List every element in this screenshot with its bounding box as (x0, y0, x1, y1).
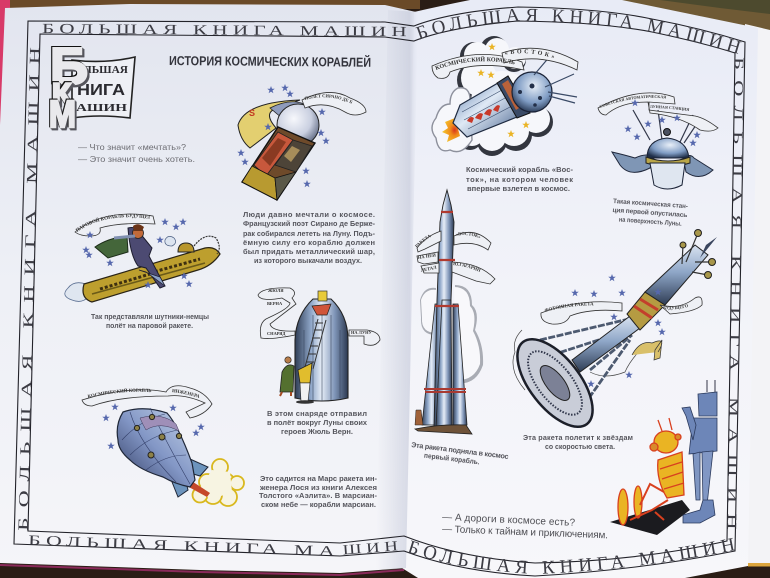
decorative border frame: БОЛЬШАЯ КНИГА МАШИН (724, 57, 747, 540)
shell body (295, 299, 348, 401)
fins (190, 459, 208, 476)
decorative border frame: ШИН (342, 539, 403, 558)
stars (477, 43, 530, 137)
truss (540, 318, 636, 405)
logo: Большая книга машин: НИГА (77, 82, 126, 99)
banner (302, 92, 366, 115)
small capsule on wire (632, 340, 662, 360)
gutter shade (376, 10, 418, 571)
reflector dish (503, 327, 607, 439)
text: Cyrano (243, 210, 375, 265)
illustration: lunar station: ЛУННАЯ СТАНЦИЯ (650, 105, 690, 112)
text: steam rocket caption (91, 312, 209, 330)
left exhaust puff (432, 88, 472, 152)
illustration: Jules Verne shell: ВЕРНА (267, 301, 283, 306)
decorative border frame: БОЛЬШАЯ КНИГА МА (28, 534, 340, 560)
banners (258, 288, 296, 339)
banners (432, 54, 524, 78)
decorative border frame: БОЛЬШАЯ КНИГА МАШИН (415, 8, 742, 54)
white cloud (460, 38, 550, 151)
text: steam rocket caption: Так представляли шутники-немцы (91, 312, 209, 321)
yellow cover edge (748, 563, 770, 566)
dome (647, 138, 689, 158)
rocket body (83, 248, 220, 302)
illustration: Vostok launch rocket (414, 188, 496, 434)
text: Cyrano: рак собирался лететь на Луну. Подъ- (243, 229, 375, 238)
upper body (645, 245, 708, 305)
logo: Большая книга машин (49, 37, 135, 136)
panel: left page (0, 4, 416, 573)
text: Aelita: Толстого «Аэлита». В марсиан- (259, 491, 378, 500)
sphere (512, 72, 552, 112)
text: Aelita: Это садится на Марс ракета ин- (260, 474, 378, 483)
text: steam rocket caption: полёт на паровой ракете. (106, 321, 193, 330)
banner (598, 93, 718, 131)
text: Cyrano: был придать металлический шар, (243, 247, 375, 256)
text: Vostok: Космический корабль «Вос- (466, 165, 574, 174)
illustration: lunar station (598, 92, 718, 190)
dialogue: top left: — Что значит «мечтать»? (78, 142, 186, 152)
exhaust flame (442, 118, 460, 142)
illustration: lunar station: СОВЕТСКАЯ АВТОМАТИЧЕСКАЯ (600, 95, 666, 108)
text: photon rocket caption: со скоростью света. (545, 442, 615, 451)
text: launch rocket caption: первый корабль. (424, 451, 480, 466)
text: lunar station: на поверхность Луны. (619, 216, 682, 228)
banner (541, 297, 702, 324)
fire cloud (192, 459, 244, 506)
illustration: Vostok launch rocket: «ВОСТОК» (456, 232, 480, 238)
banner (75, 214, 155, 236)
illustration: steam rocket with rider (64, 214, 221, 303)
illustration: Vostok launch rocket: Ю.ГАГАРИН (453, 262, 481, 272)
decorative border frame: БОЛЬШАЯ КНИГА МАШИН (408, 538, 735, 574)
cover edge line (0, 565, 404, 575)
illustration: photon rocket: БУДУЩЕГО (663, 304, 688, 310)
text: Jules Verne: в полёт вокруг Луны своих (267, 418, 368, 427)
metal globe (277, 104, 319, 146)
logo: Большая книга машин: К (52, 77, 71, 111)
text: Vostok: ток», на котором человек (466, 175, 573, 184)
text: photon rocket caption: Эта ракета полетит к звёздам (523, 433, 633, 442)
banners (417, 231, 491, 252)
stars (571, 274, 666, 387)
text: launch rocket caption: Эта ракета подняла в космос (411, 440, 509, 461)
shaft (572, 316, 640, 372)
text: Aelita (259, 474, 378, 509)
cloud outline (513, 330, 645, 390)
decorative border frame: БОЛЬШАЯ КНИГА МАШИН (17, 37, 44, 531)
banners (82, 386, 212, 418)
boiler and steam pipe (178, 243, 194, 252)
text: Jules Verne: героев Жюль Верн. (281, 427, 353, 436)
illustration: Jules Verne shell: СНАРЯД (267, 331, 285, 336)
text: Aelita: женера Лося из книги Алексея (259, 483, 377, 492)
blue robot (682, 380, 717, 523)
illustration: Aelita rocket (82, 385, 245, 507)
dialogue: bottom (442, 512, 608, 541)
stars (237, 84, 330, 187)
logo big letters: Б (50, 37, 88, 96)
text: Jules Verne: В этом снаряде отправил (267, 409, 367, 418)
purple band (140, 416, 179, 431)
stars (102, 403, 205, 449)
dialogue: bottom: — А дороги в космосе есть? (442, 512, 576, 529)
smoke (65, 283, 88, 301)
antennas (633, 110, 696, 143)
illustration: Vostok launch rocket: РАКЕТА (414, 234, 431, 248)
illustration: Aelita rocket: КОСМИЧЕСКИЙ КОРАБЛЬ (87, 388, 152, 398)
text: launch rocket caption (410, 440, 509, 470)
illustration: Cyrano flying capsule: S (249, 108, 255, 118)
portholes (134, 414, 182, 458)
text: photon rocket caption (523, 433, 633, 451)
dialogue: bottom: — Только к тайнам и приключениям. (442, 524, 608, 541)
illustration: two robots (610, 380, 717, 535)
yellow robot (618, 418, 684, 525)
antennas with balls (682, 233, 712, 275)
fire cloud fill (200, 470, 232, 500)
decorative border frame: БОЛЬШАЯ КНИГА МАШИН (42, 22, 412, 40)
logo: Большая книга машин: ОЛЬШАЯ (75, 64, 128, 76)
illustration: Aelita rocket: ИНЖЕНЕРА (172, 388, 200, 398)
illustration: Vostok spacecraft: «ВОСТОК» (505, 49, 554, 58)
person at hatch with flag (312, 304, 331, 315)
text: Cyrano: Французский поэт Сирано де Берже- (243, 219, 375, 228)
dialogue: top left (78, 142, 195, 164)
illustration: Vostok launch rocket: НА НЕЙ (418, 253, 436, 259)
illustration: photon rocket: ФОТОННАЯ РАКЕТА (544, 302, 594, 312)
service module (453, 83, 517, 137)
illustration: Cyrano flying capsule (237, 84, 366, 201)
smoke cloud (421, 287, 480, 380)
side boosters (422, 304, 441, 425)
text: Jules Verne (267, 409, 368, 436)
dialogue: top left: — Это значит очень хотеть. (78, 154, 195, 164)
stars (82, 218, 193, 288)
launch pad (415, 425, 472, 434)
carriage cabin (242, 127, 315, 200)
title: ИСТОРИЯ КОСМИЧЕСКИХ КОРАБЛЕЙ (169, 53, 371, 70)
antennas (534, 55, 577, 103)
logo flag (72, 57, 135, 118)
logo: Большая книга машин: М (49, 94, 76, 136)
two men at ladder (280, 365, 294, 392)
illustration: Jules Verne shell (258, 288, 380, 404)
text: Cyrano: ёмную силу его кораблю должен (243, 238, 375, 247)
ground shadow (610, 500, 690, 535)
belt and base (646, 157, 690, 166)
sail (238, 100, 300, 148)
rider (128, 228, 165, 288)
small figure at the base (415, 410, 423, 425)
ladder (305, 319, 326, 369)
collar with red rings (627, 292, 665, 330)
text: lunar station: Такая космическая стан- (613, 198, 688, 210)
panel: right page (402, 0, 758, 578)
smoke cloud shadow (420, 285, 483, 383)
text: Vostok: впервые взлетел в космос. (467, 184, 570, 193)
text: Vostok (466, 165, 574, 193)
text: Cyrano: из которого выкачали воздух. (254, 256, 362, 265)
text: Aelita: ском небе — корабли марсиан. (261, 500, 376, 509)
illustration: Vostok spacecraft: КОСМИЧЕСКИЙ КОРАБЛЬ (434, 56, 515, 70)
illustration: Vostok spacecraft (431, 36, 578, 156)
text: lunar station: ция первой опустилась (612, 206, 688, 219)
illustration: photon rocket (512, 229, 717, 428)
exhaust flame (187, 480, 210, 497)
illustration: Vostok launch rocket: ЛЕТАЛ (420, 266, 437, 272)
stars (624, 99, 701, 146)
illustration: steam rocket with rider: ПАРОВОЙ КОРАБЛЬ БУДУЩЕГО (75, 214, 152, 232)
text: lunar station (612, 198, 688, 228)
logo: Большая книга машин: АШИН (76, 102, 128, 114)
illustration: Jules Verne shell: НА ЛУНУ (351, 330, 373, 335)
illustration: Jules Verne shell: ЖЮЛЯ (268, 288, 284, 293)
right page edge stack (745, 24, 770, 563)
dark cloud shadow (457, 36, 553, 156)
core stage (434, 190, 454, 427)
hull (117, 409, 195, 487)
wings (612, 152, 654, 172)
text: Cyrano: Люди давно мечтали о космосе. (243, 210, 375, 219)
